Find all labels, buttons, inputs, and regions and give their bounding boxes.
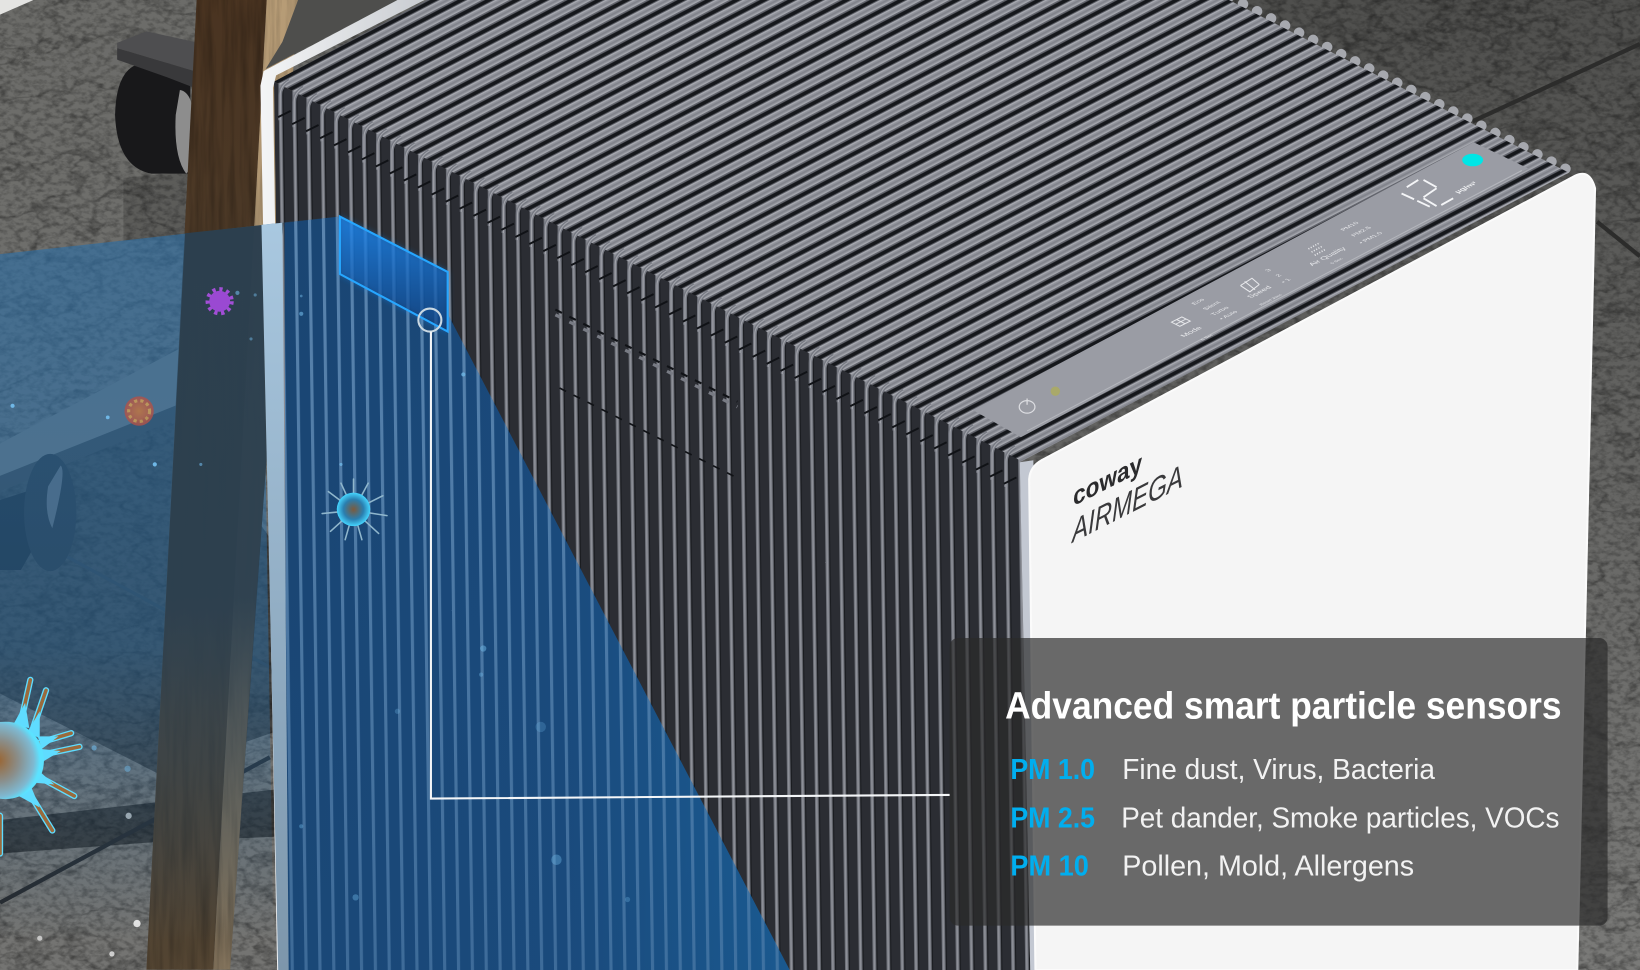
row: PM 10: PM 10 <box>1010 849 1089 881</box>
speed control: 3 <box>1264 268 1274 272</box>
row: PM 1.0: PM 1.0 <box>1010 753 1095 785</box>
front grille ribs <box>274 82 1030 970</box>
blue sensing beam over purifier <box>261 217 790 970</box>
row: PM 2.5: PM 2.5 <box>1010 801 1095 833</box>
control panel <box>973 142 1528 437</box>
mode control: Mode <box>1178 325 1204 338</box>
callout leader line <box>418 309 950 799</box>
wooden leg <box>136 0 303 970</box>
mode control: Eco <box>1190 298 1207 306</box>
speed control: • 1 <box>1280 278 1293 284</box>
row: PM 10: Pollen, Mold, Allergens <box>1122 849 1414 881</box>
chair base and lower wheel <box>0 345 186 571</box>
icon: large blue virus <box>0 680 79 853</box>
speed control: Reset 3sec <box>1258 293 1284 306</box>
mode control: Silent <box>1201 301 1223 311</box>
icon: orange pollen <box>124 396 154 426</box>
rib end scallops <box>1229 0 1567 169</box>
sensor window <box>340 217 448 332</box>
brand logo: coway <box>1073 447 1143 512</box>
mode control: 5 Sec <box>1199 333 1215 341</box>
row: PM 2.5: Pet dander, Smoke particles, VOCs <box>1121 801 1559 833</box>
heading: Advanced smart particle sensors <box>1005 685 1562 727</box>
brand logo: AIRMEGA <box>1071 458 1183 551</box>
PM readout 12 <box>1402 180 1453 207</box>
blue sensing beam over floor <box>0 217 340 970</box>
wood leg inside beam <box>146 223 283 970</box>
top grille ribs <box>274 0 1569 462</box>
info panel <box>950 638 1608 926</box>
cyan indicator <box>1462 154 1483 166</box>
white side panel <box>1029 174 1595 970</box>
air quality control: 5 Sec <box>1329 257 1345 265</box>
row: PM 1.0: Fine dust, Virus, Bacteria <box>1122 753 1435 785</box>
unit label: µg/m³ <box>1452 181 1480 194</box>
rib shoulders and notches <box>278 81 1016 487</box>
icon: purple virus <box>208 290 231 313</box>
air quality control: PM2.5 <box>1350 226 1374 237</box>
status light <box>1051 386 1060 396</box>
speed control: Speed <box>1245 285 1274 299</box>
caster wheel, upper left <box>115 31 195 174</box>
mode control <box>1171 298 1240 341</box>
speed control: 2 <box>1274 273 1284 278</box>
speed control <box>1240 268 1293 306</box>
icon: blue virus <box>322 479 387 540</box>
mode control: Turbo <box>1210 306 1232 316</box>
dust particles <box>10 291 630 956</box>
air quality control: PM10 <box>1339 221 1361 232</box>
icon: power button <box>1019 399 1035 413</box>
mode control: • Auto <box>1218 310 1240 321</box>
handle recess marks on front face <box>555 310 737 478</box>
air quality control <box>1306 221 1385 267</box>
brand logo <box>1071 447 1183 551</box>
air quality control: Air Quality <box>1306 246 1348 267</box>
white side panel edge <box>1020 460 1041 970</box>
white frame rim <box>260 0 425 970</box>
air quality control: • PM1.0 <box>1357 231 1385 245</box>
floor behind purifier top edge <box>266 0 397 69</box>
